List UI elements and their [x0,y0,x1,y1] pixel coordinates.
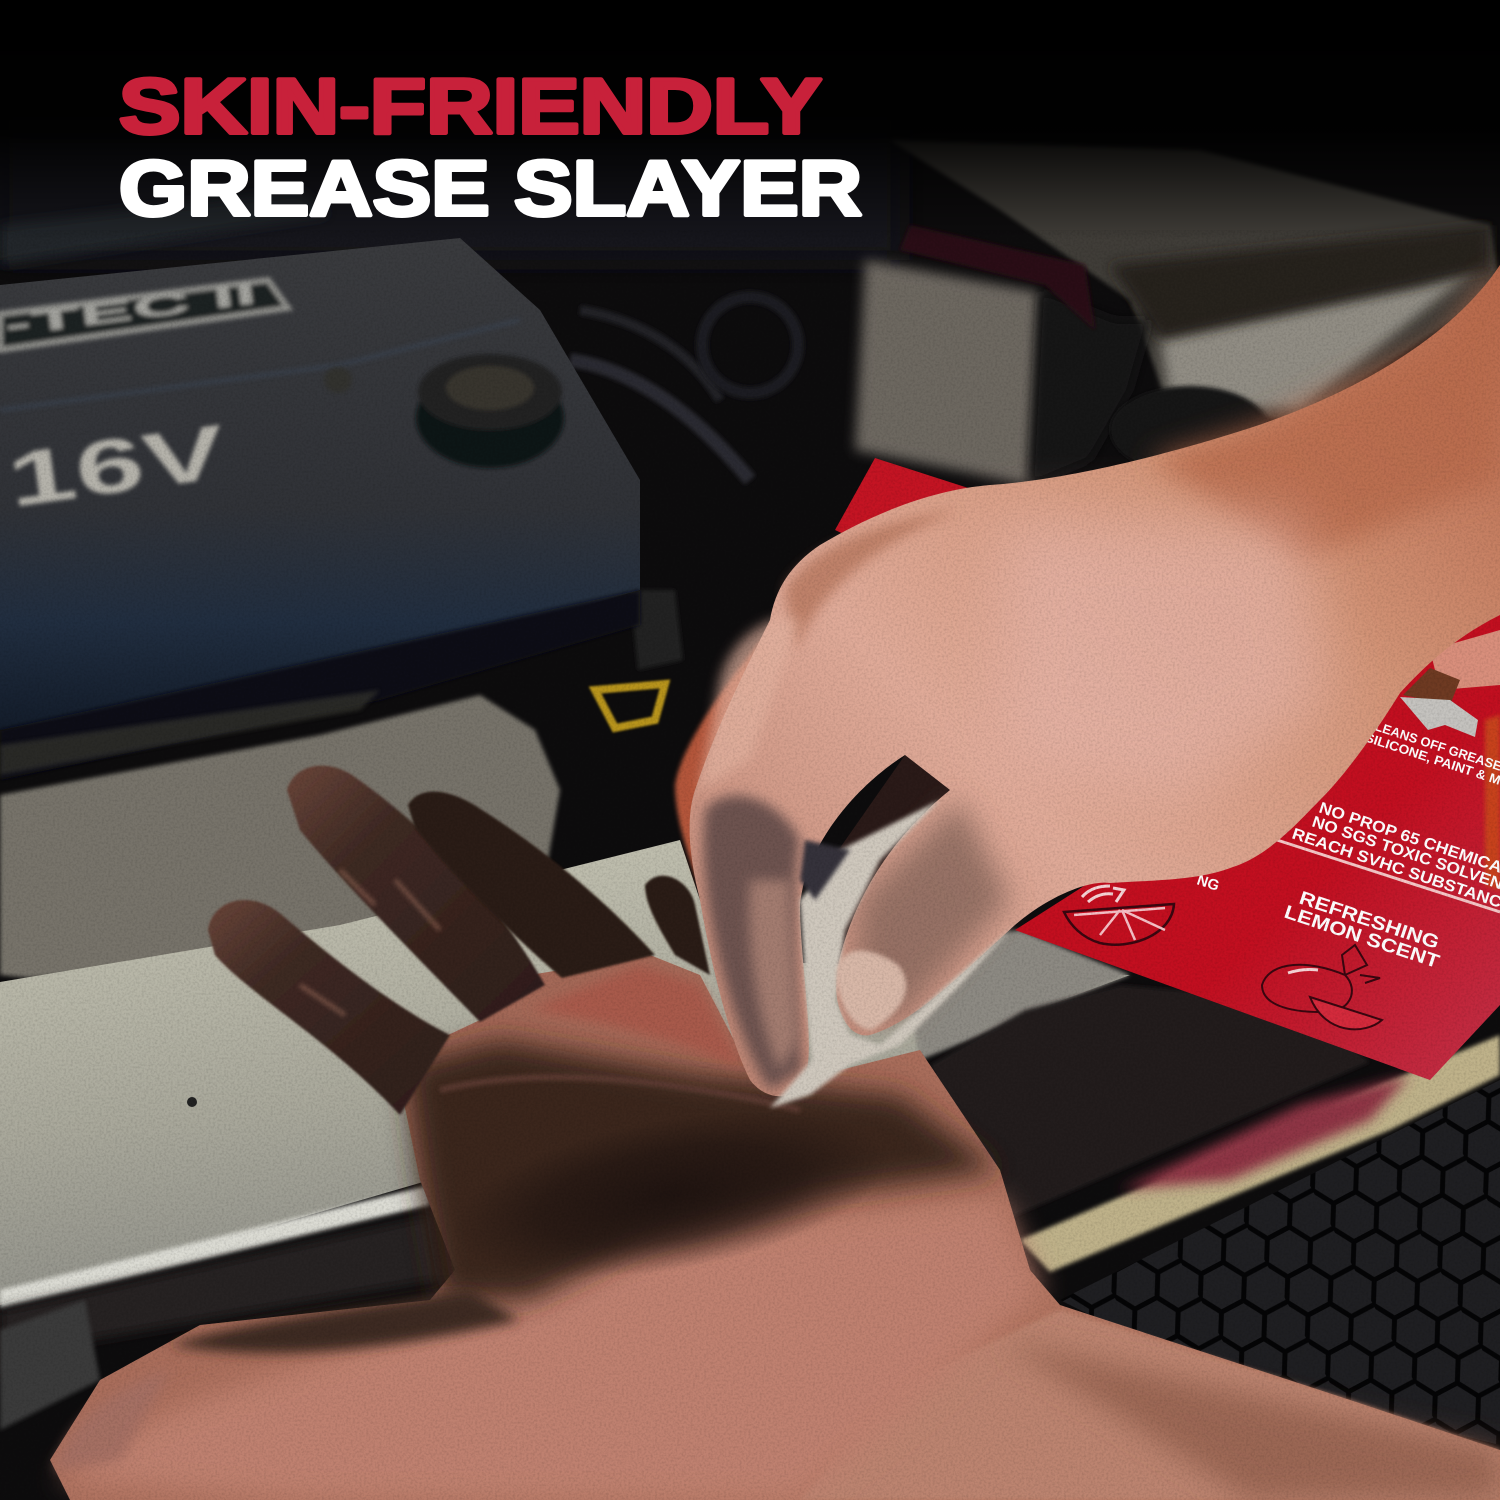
left hand, grease covered [50,766,1500,1500]
red product box: LEMON SCENT [1281,902,1442,973]
oil filler cap [324,354,564,468]
honeycomb grille [1060,1080,1500,1445]
dark front plate [930,985,1370,1220]
title line 2: GREASE SLAYER [119,144,862,232]
icon: whole lemon [1262,945,1382,1029]
red product box: NO PROP 65 CHEMICA [1317,800,1500,877]
grey oil pan casting [0,695,560,978]
engine badge: E-TEC II [0,277,288,350]
red product box: SILICONE, PAINT & M [1363,730,1500,788]
torn paper towel artwork on box [1400,630,1500,737]
red product box: REACH SVHC SUBSTANC [1290,826,1500,912]
silver radiator support panel [0,840,1130,1430]
title [119,62,862,232]
pink reflection [1120,1075,1410,1190]
thumbnail [837,951,906,1030]
red product box: CLEANS OFF GREASE [1364,716,1500,774]
red product box: REFRESHING [1296,888,1442,954]
engine cover with lettering [0,238,640,780]
icon: lemon slice [1064,886,1174,945]
right hand, wiping [675,265,1500,1108]
grease on thumb [850,800,1010,1020]
air filter box [855,140,1500,485]
engine badge: E-TEC II: -TEC II [3,277,259,343]
yellow dipstick handle [595,684,665,728]
finger: ring [287,766,545,1022]
red product box: NO SGS TOXIC SOLVEN [1310,814,1500,893]
red product box: NG [1195,872,1221,895]
grease across palm [405,1040,1000,1300]
finger: index stub [645,876,710,975]
title line 1: SKIN-FRIENDLY [119,62,822,150]
engine lettering: 16V: 16V [3,409,231,524]
dark top gradient [0,0,1500,240]
shop towel [770,800,1015,1108]
finger: middle [408,792,655,978]
chrome trim strip [1020,1035,1500,1272]
grease on index finger [703,796,802,1090]
red product box [835,458,1500,1080]
finger: little [208,900,450,1115]
